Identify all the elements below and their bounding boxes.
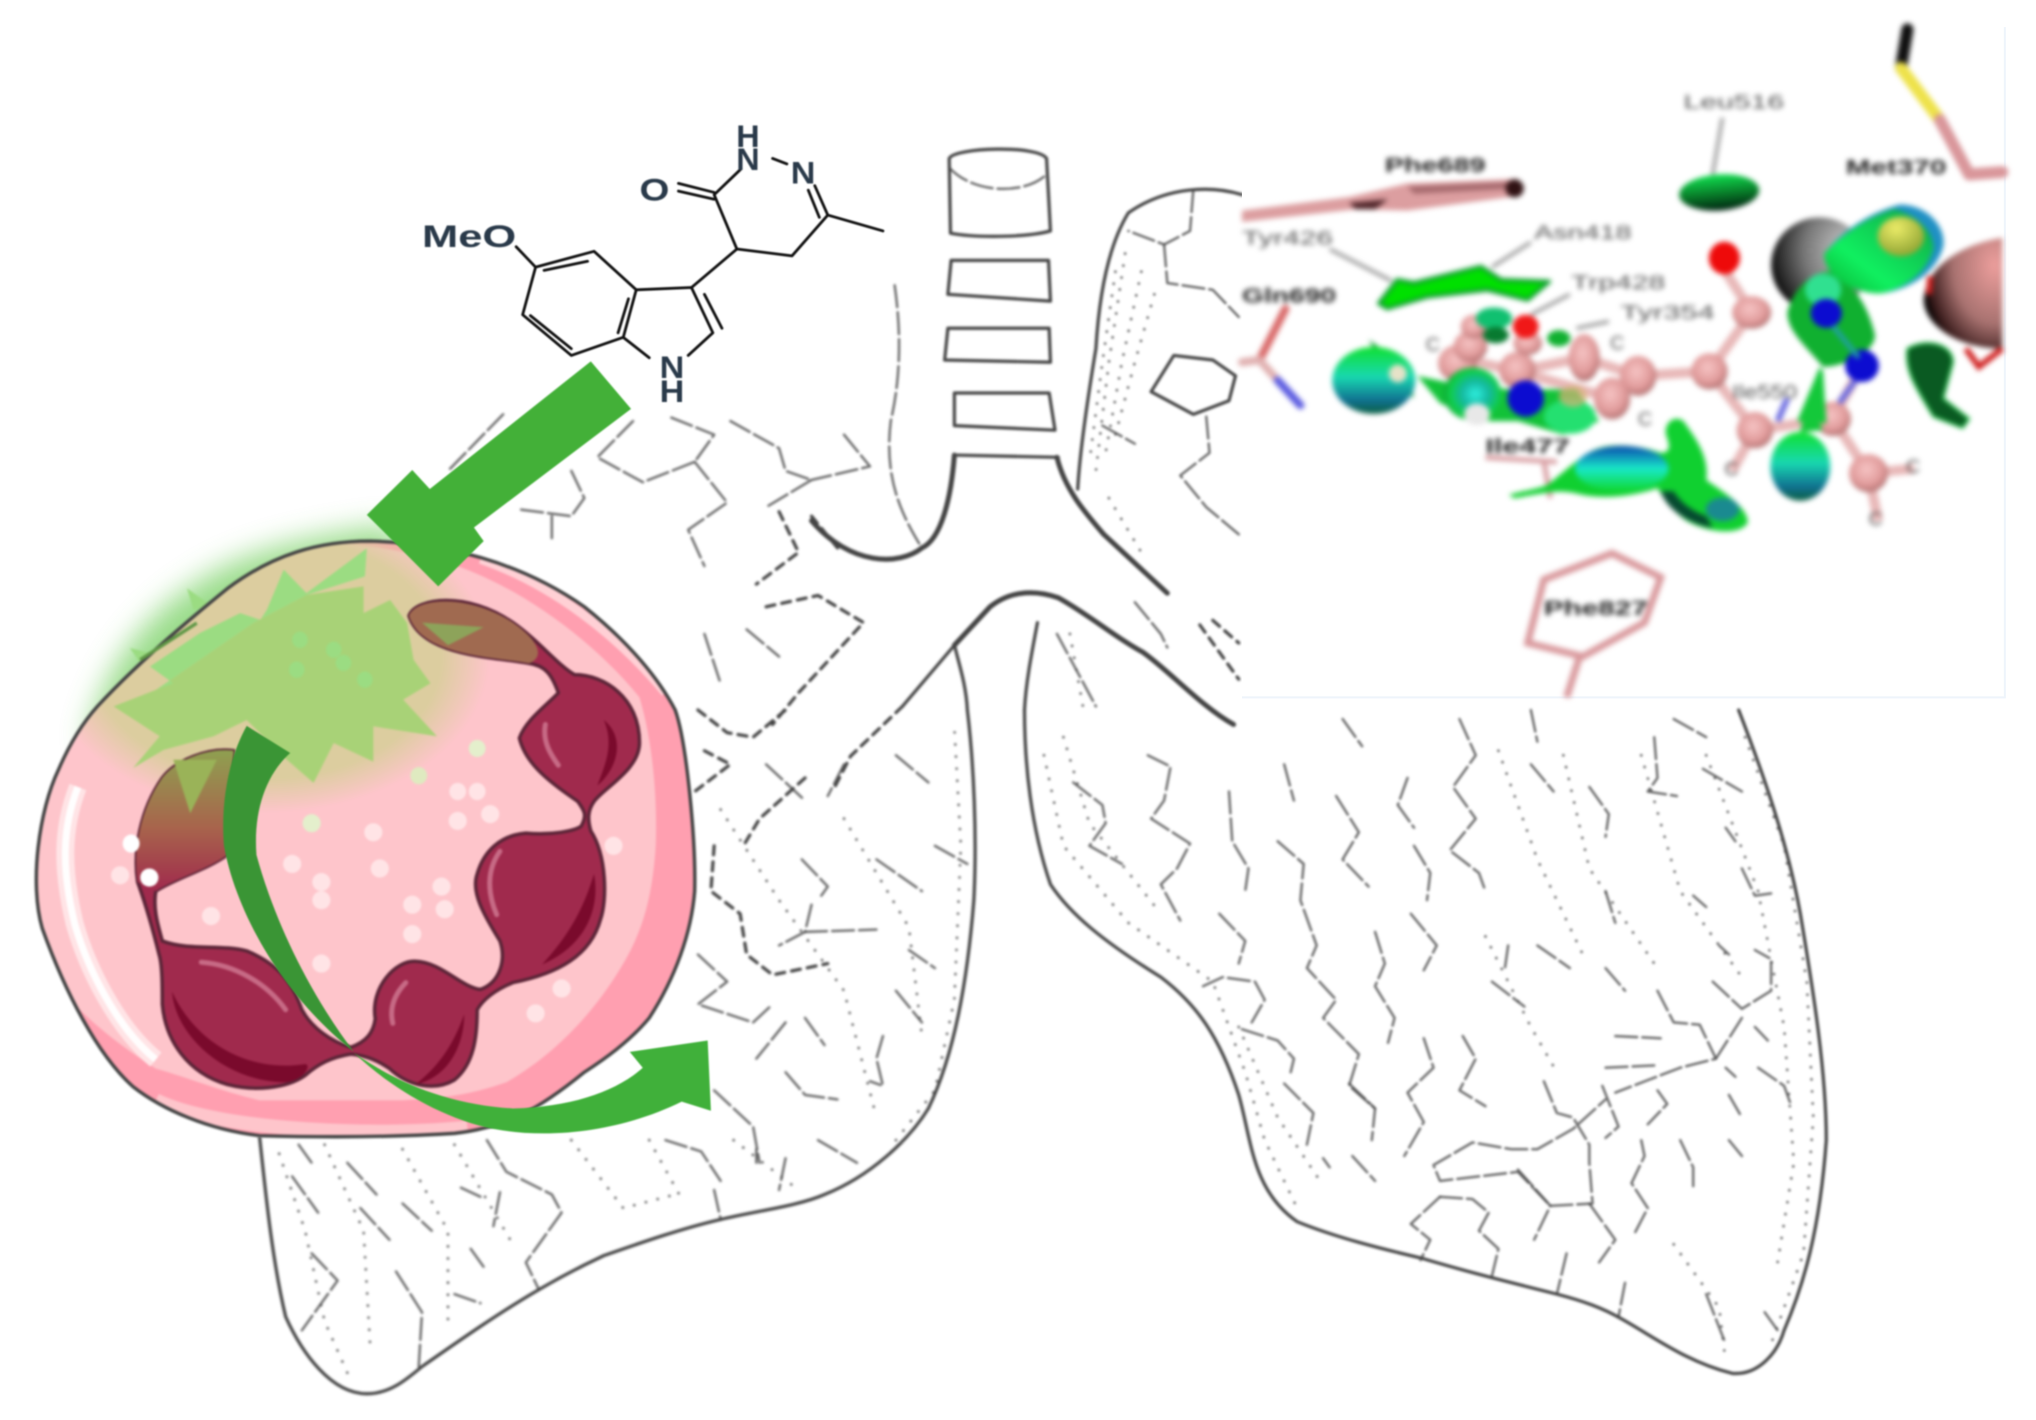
residue labels, thin [1242, 92, 1920, 530]
surface: grey sphere [1771, 217, 1868, 312]
residue labels, thin: C [1610, 333, 1624, 355]
residue labels: Phe827 [1544, 597, 1648, 620]
structure atom labels: H [660, 374, 684, 409]
oxygen atom fragment [1929, 276, 2002, 367]
residue labels, thin: C [1868, 508, 1883, 530]
residue labels: Met370 [1846, 156, 1946, 179]
residue labels, thin: Leu516 [1683, 92, 1784, 114]
right lung septa [1044, 710, 1813, 1362]
nucleus shadows [172, 720, 617, 1084]
structure atom labels: MeO [422, 219, 516, 254]
dark green lobe [1907, 343, 1969, 428]
left lung [260, 644, 975, 1394]
segmented nucleus [136, 601, 639, 1088]
burst lighter rays [130, 548, 373, 690]
neutrophil cell with green burst [33, 508, 698, 1140]
right lung outline [1024, 710, 1826, 1374]
structure atom labels: N [736, 142, 760, 177]
surface: right green lobes [1770, 205, 1944, 501]
large pink sphere [1924, 238, 2002, 349]
cytoplasm [11, 544, 656, 1100]
residue labels, thin: Tyr354 [1620, 302, 1715, 324]
structure atom labels: O [639, 173, 669, 208]
residue stick: Gln [1242, 309, 1300, 405]
left lung septa [279, 710, 967, 1380]
cell body [37, 542, 694, 1136]
dark green curved arrow tail [223, 726, 354, 1052]
green tint on left lobe [173, 760, 217, 813]
surface: Leu patch [1676, 171, 1763, 214]
upper left lung septa [448, 414, 870, 724]
nucleus highlights [201, 724, 558, 1023]
structure atom labels: H [736, 119, 760, 154]
surface: central blob with nitrogen [1417, 368, 1599, 435]
surface: flat green sheet [1379, 267, 1549, 308]
left lung outline [260, 644, 975, 1394]
bronchus arch [834, 593, 1234, 788]
residue labels, thin: Trp428 [1571, 272, 1665, 294]
khaki tint over cytoplasm [82, 542, 480, 806]
residue ring: Phe [1528, 553, 1661, 697]
brown upper lobe [409, 601, 538, 663]
tinted outline segment [140, 623, 197, 660]
contact lines [1330, 118, 1722, 498]
structure atom labels [422, 119, 815, 409]
residue labels: Gln690 [1242, 284, 1336, 307]
residue labels, thin: Tyr426 [1242, 228, 1333, 250]
green glow [88, 525, 422, 770]
membrane highlight [65, 787, 156, 1060]
right lung upper lobe [1024, 189, 1242, 710]
ligand ball and stick [1438, 242, 1914, 521]
surface: lower green blob [1509, 419, 1748, 531]
residue labels, thin: Asn418 [1534, 222, 1632, 244]
right lung lower lobe [1024, 710, 1826, 1374]
residue labels [1242, 154, 1946, 620]
residue labels, thin: C [1638, 409, 1652, 431]
residue labels, thin: C [1906, 456, 1920, 478]
granules [111, 740, 623, 1022]
membrane light band [65, 787, 156, 1060]
structure atom labels: N [660, 350, 684, 385]
green tint on upper lobe [422, 623, 484, 645]
upper right rim light stripe [480, 559, 665, 693]
bright curved arrow head [354, 1041, 711, 1133]
trachea with cartilage rings [812, 149, 1167, 593]
residue labels, thin: C [1724, 458, 1738, 480]
lower rim light band [156, 1100, 467, 1132]
structure bonds [516, 158, 883, 358]
left lobe tinted [136, 750, 234, 891]
large arrow from molecule to cell [367, 361, 631, 586]
residue labels: Ile477 [1485, 435, 1570, 458]
structure atom labels: N [791, 155, 815, 190]
spiky green burst [114, 586, 437, 783]
residue stick: Phe [1242, 179, 1524, 222]
residue labels, thin: C [1426, 334, 1440, 356]
residue labels, thin: Ile550 [1732, 381, 1797, 403]
cell outline [36, 541, 695, 1137]
residue stick: Met [1901, 29, 2002, 174]
surface: left aromatic ball [1332, 340, 1415, 414]
surface: small green patches [1476, 307, 1570, 346]
residue labels: Phe689 [1385, 154, 1485, 177]
